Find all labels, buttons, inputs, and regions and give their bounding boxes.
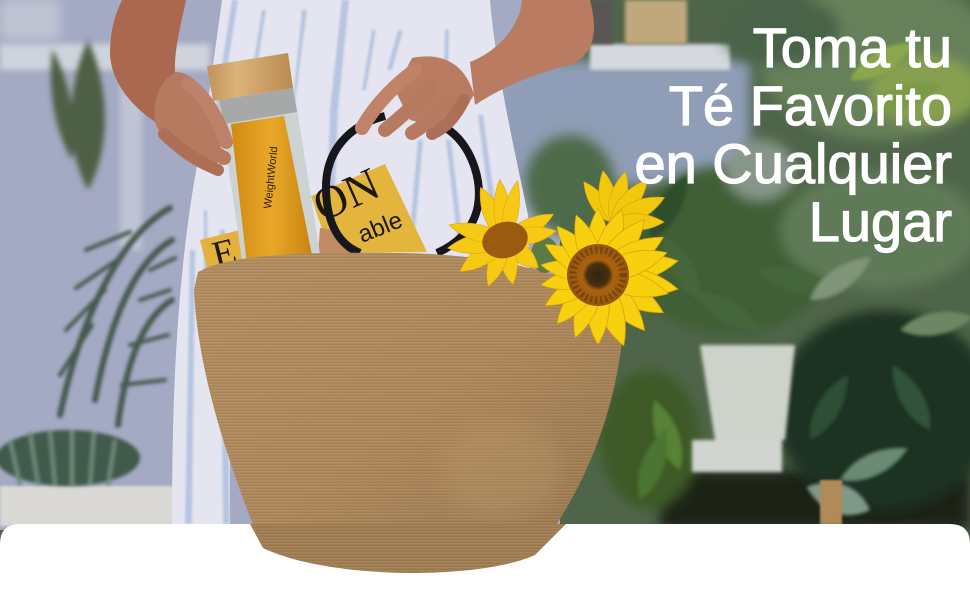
bamboo lid: [207, 53, 293, 101]
magazine lettering: [208, 158, 406, 277]
woven bag: [194, 253, 625, 570]
background plants, left: [0, 40, 175, 486]
left arm and hand: [110, 0, 225, 175]
sunflower: small: [446, 179, 558, 289]
bottle glass: [219, 90, 320, 267]
magazine lettering: E: [208, 230, 241, 277]
title: Té Favorito: [669, 74, 952, 137]
tea: [231, 116, 312, 266]
title: Lugar: [809, 190, 952, 253]
title: Toma tu: [753, 16, 952, 79]
fingers over bottle: [164, 84, 226, 170]
right arm: [470, 0, 594, 105]
magazines: [200, 158, 427, 277]
magazine lettering: ON: [305, 158, 387, 231]
right hand over handle: [362, 56, 474, 134]
sunflower: large: [539, 206, 680, 350]
leaves behind flowers: [531, 237, 559, 273]
pale planter: [692, 345, 795, 472]
bag base over panel: [250, 524, 566, 573]
bottle brand: WeightWorld: [262, 146, 281, 209]
woman's dress: [172, 0, 530, 524]
bottle: [207, 53, 320, 267]
sunflower: back: [577, 169, 669, 231]
title: en Cualquier: [634, 132, 952, 195]
magazine lettering: able: [354, 207, 406, 249]
metal ring: [219, 88, 297, 124]
background plants, right: [525, 0, 970, 525]
title: [634, 16, 952, 253]
bag handle: [326, 116, 479, 253]
white bottom panel: [0, 524, 970, 600]
